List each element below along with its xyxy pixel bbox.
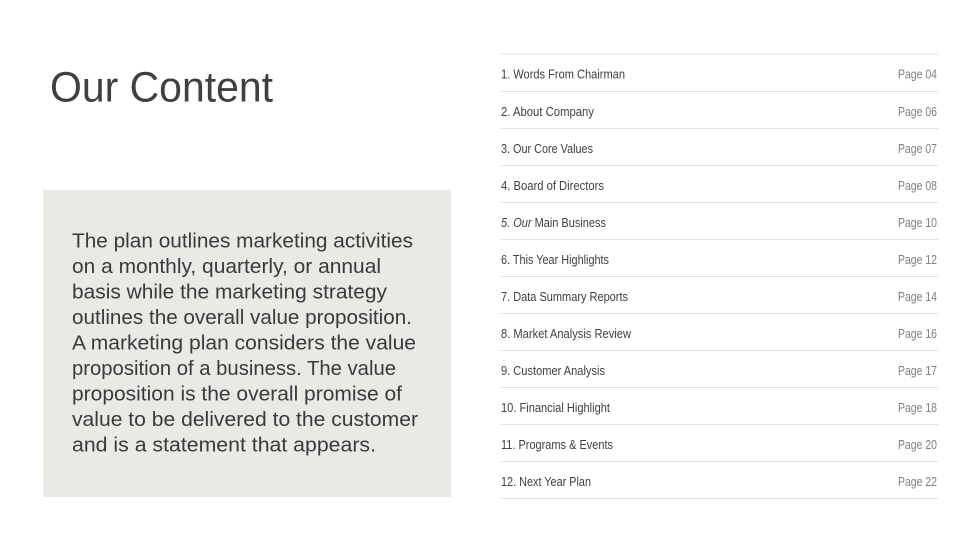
text block: marketing plan description: outlines the overall value proposition.	[72, 306, 412, 329]
row 8: 8. Market Analysis Review	[501, 327, 632, 341]
row 5: 5. Our Main Business	[501, 216, 606, 230]
text block: marketing plan description	[72, 230, 418, 456]
row 3	[501, 142, 938, 166]
row 12: Page 22	[898, 475, 937, 489]
text block: marketing plan description: The plan outlines marketing activities	[72, 230, 413, 252]
text block: marketing plan description: basis while the marketing strategy	[72, 280, 388, 304]
row 7	[501, 290, 938, 314]
row 10: Page 18	[898, 401, 937, 415]
table of contents	[501, 54, 938, 498]
row 6: 6. This Year Highlights	[501, 253, 609, 267]
row 3: Page 07	[898, 142, 937, 156]
row 9: Page 17	[898, 364, 937, 378]
row 1	[501, 68, 938, 92]
row 1: Page 04	[898, 68, 937, 82]
panel: description	[43, 190, 451, 497]
text block: marketing plan description: proposition of a business. The value	[72, 357, 396, 380]
text block: marketing plan description: value to be delivered to the customer	[72, 408, 418, 431]
text block: marketing plan description: A marketing plan considers the value	[72, 332, 416, 354]
row 11: 11. Programs & Events	[501, 438, 613, 452]
row 11: Page 20	[898, 438, 937, 452]
row 9	[501, 364, 938, 388]
row 10: 10. Financial Highlight	[501, 401, 610, 415]
row 8	[501, 327, 938, 350]
row 4: Page 08	[898, 179, 937, 193]
row 7: Page 14	[898, 290, 937, 304]
row 10	[501, 401, 938, 424]
row 5: Page 10	[898, 216, 937, 230]
row 9: 9. Customer Analysis	[501, 364, 605, 378]
text block: marketing plan description: proposition is the overall promise of	[72, 382, 402, 406]
row 7: 7. Data Summary Reports	[501, 290, 628, 304]
row 2: Page 06	[898, 105, 937, 119]
text block: marketing plan description: and is a statement that appears.	[72, 434, 376, 456]
row 2: 2. About Company	[501, 105, 595, 119]
row 12: 12. Next Year Plan	[501, 475, 591, 489]
row 4	[501, 179, 938, 202]
row 6	[501, 253, 938, 276]
row 11	[501, 438, 938, 462]
row 6: Page 12	[898, 253, 937, 267]
title: Our Content	[50, 64, 273, 112]
row 8: Page 16	[898, 327, 937, 341]
row 4: 4. Board of Directors	[501, 179, 604, 193]
row 3: 3. Our Core Values	[501, 142, 593, 156]
row 1: 1. Words From Chairman	[501, 68, 625, 82]
row 5	[501, 216, 938, 240]
text block: marketing plan description: on a monthly, quarterly, or annual	[72, 255, 381, 278]
row 12	[501, 475, 938, 498]
row 2	[501, 105, 938, 128]
